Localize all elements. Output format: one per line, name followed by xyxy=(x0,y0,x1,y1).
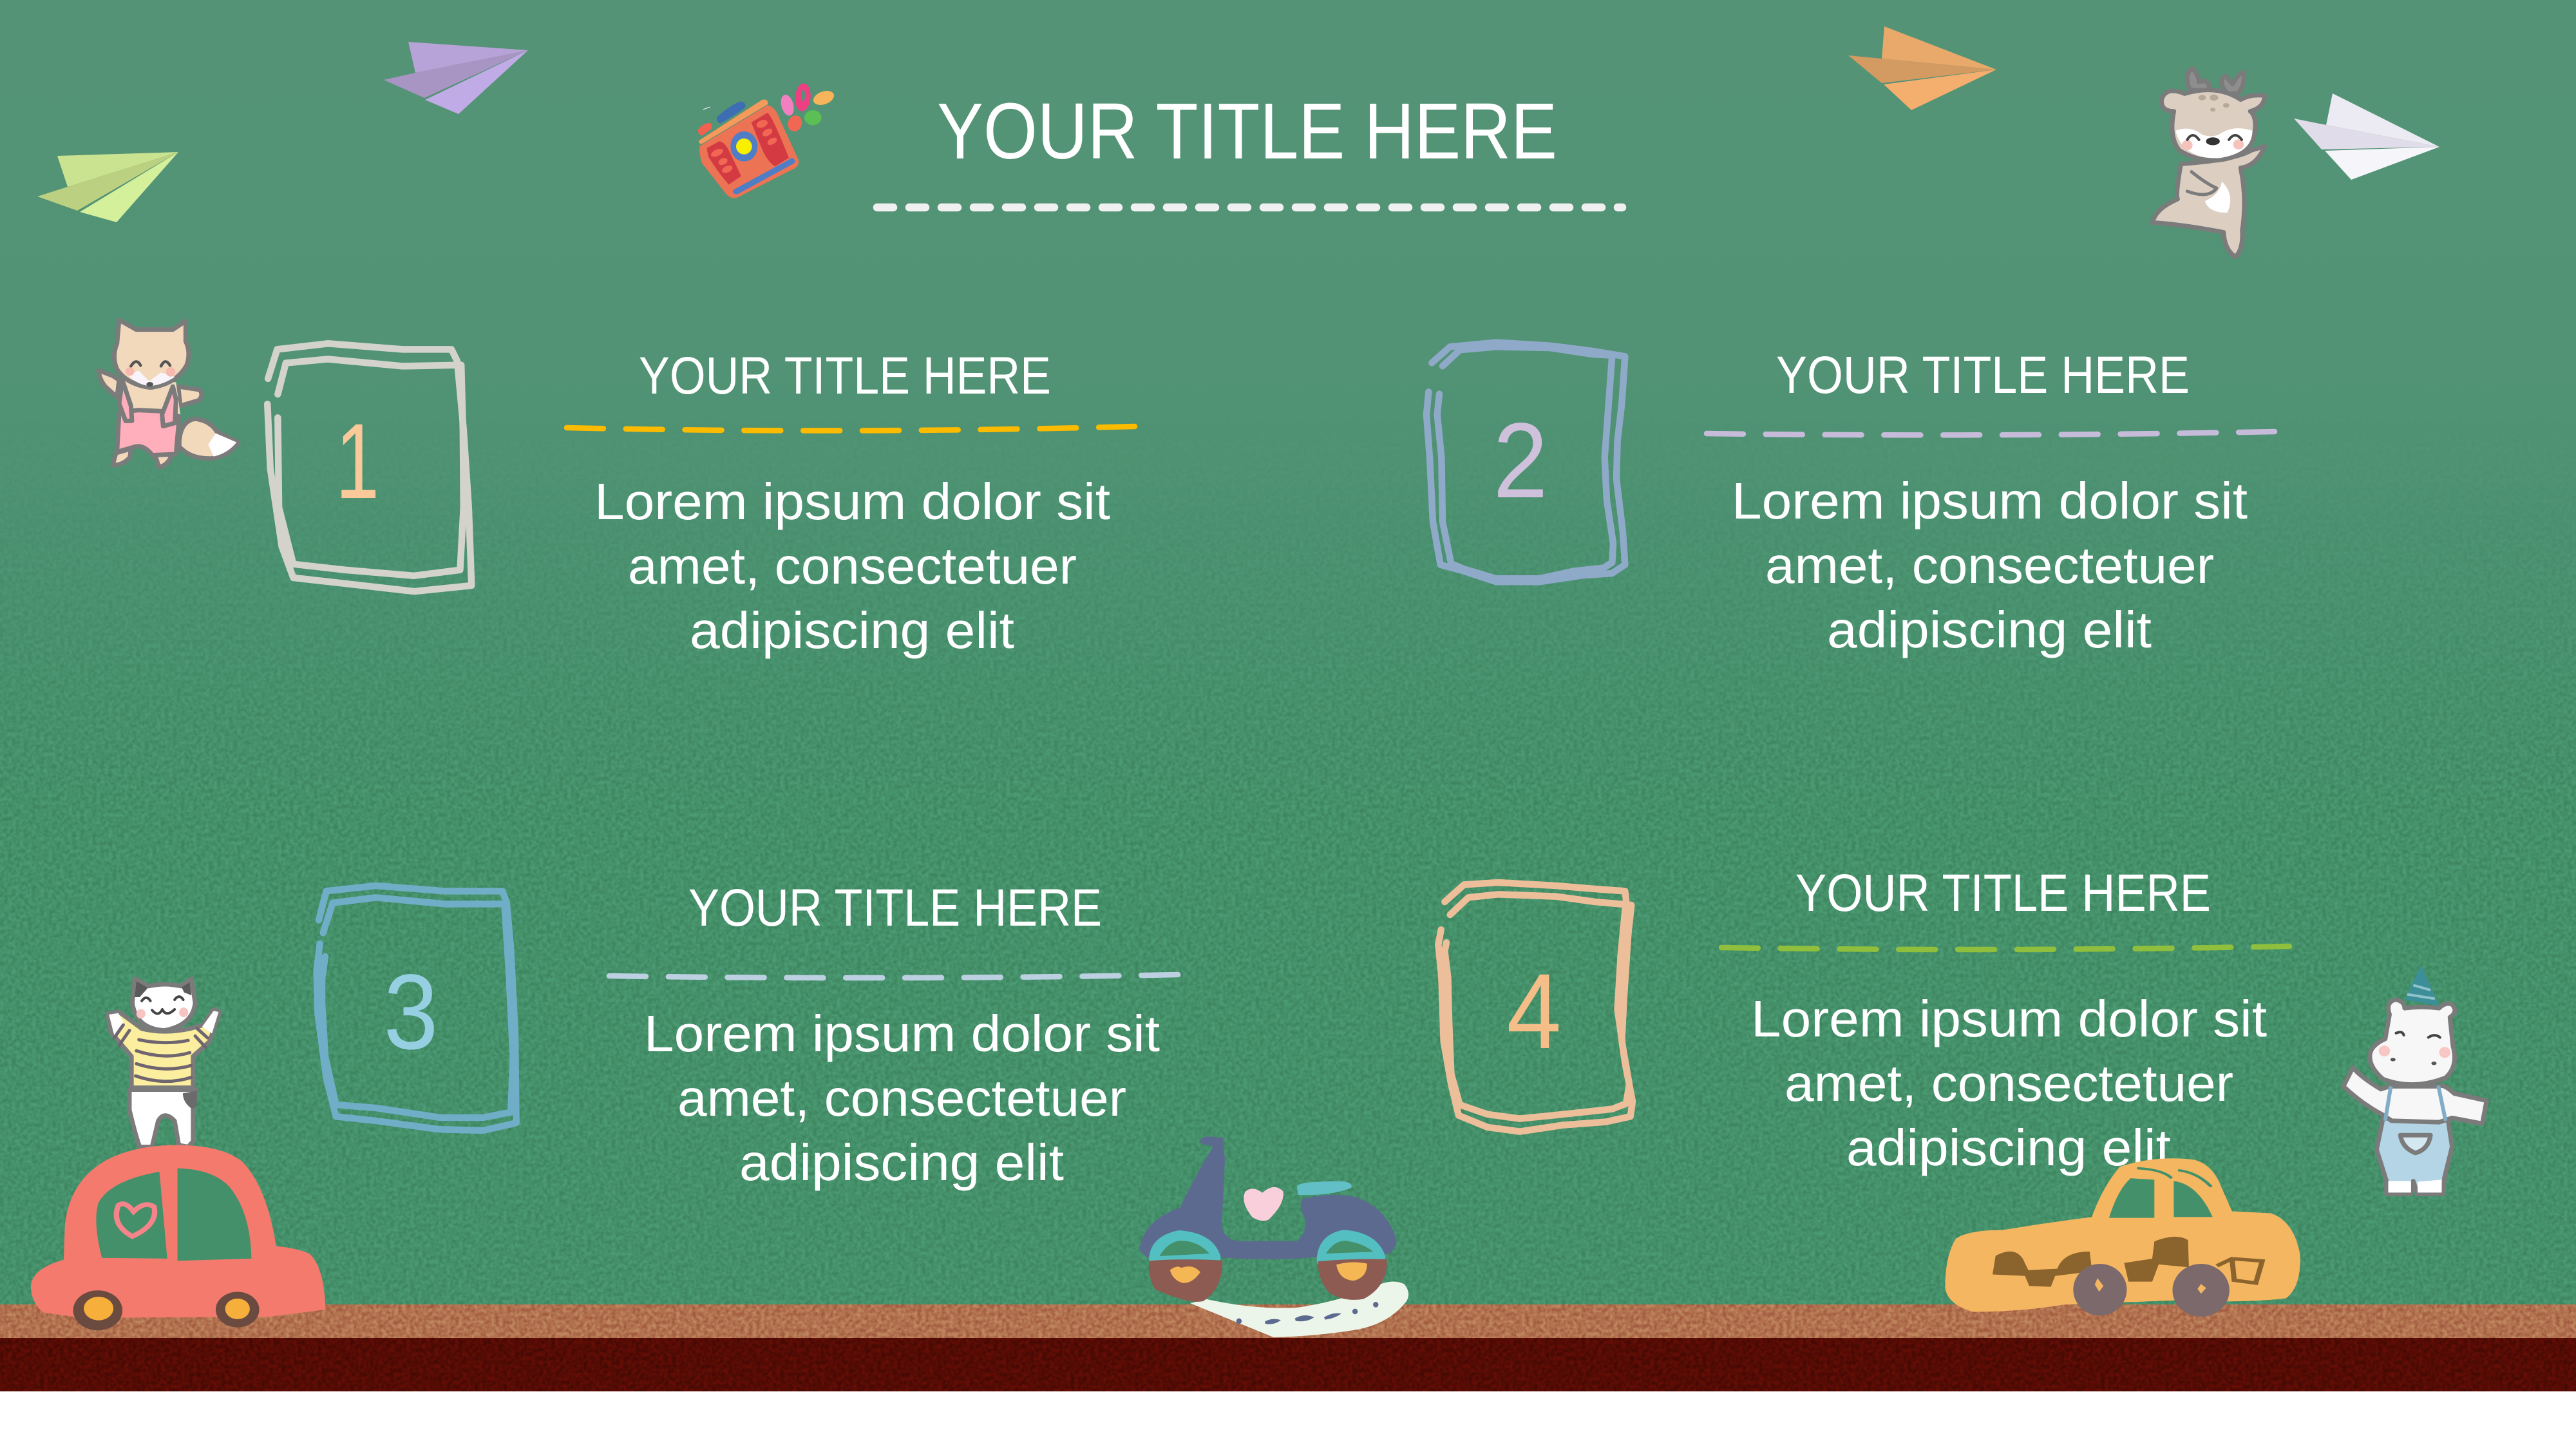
body text 3: amet, consectetuer xyxy=(677,1069,1126,1127)
number 2: 2 xyxy=(1493,401,1548,520)
character: fox in pink overalls xyxy=(99,320,238,467)
body text 3: Lorem ipsum dolor sit xyxy=(644,1005,1160,1062)
body text 3: adipiscing elit xyxy=(739,1134,1064,1191)
dashed divider 2 xyxy=(1707,432,2275,435)
body text 4 xyxy=(1751,990,2267,1176)
title dashed divider xyxy=(877,204,1622,211)
heading 1: YOUR TITLE HERE xyxy=(639,347,1051,405)
body text 4: amet, consectetuer xyxy=(1785,1054,2233,1112)
body text 1: adipiscing elit xyxy=(690,602,1014,659)
heading 3: YOUR TITLE HERE xyxy=(688,879,1102,937)
icon: yellow taxi xyxy=(1945,1158,2300,1317)
heading 2: YOUR TITLE HERE xyxy=(1776,346,2190,405)
paper plane: white xyxy=(2294,93,2439,180)
panel: block 4 xyxy=(1438,864,2289,1176)
number 4: 4 xyxy=(1507,952,1561,1071)
body text 2: adipiscing elit xyxy=(1827,601,2152,658)
panel: block 3 xyxy=(317,879,1179,1191)
number frame 1 xyxy=(267,343,471,591)
character: cat in striped sweater xyxy=(108,978,220,1147)
body text 2 xyxy=(1732,472,2248,658)
body text 1 xyxy=(594,473,1110,659)
icon: toy camera xyxy=(698,82,836,198)
body text 2: Lorem ipsum dolor sit xyxy=(1732,472,2248,529)
character: hippo in blue overalls xyxy=(2344,965,2486,1194)
title: YOUR TITLE HERE xyxy=(937,88,1557,176)
dashed divider 1 xyxy=(567,426,1135,431)
body text 1: amet, consectetuer xyxy=(628,537,1077,595)
number frame 2 xyxy=(1426,343,1625,582)
panel: block 1 xyxy=(267,343,1135,659)
dashed divider 4 xyxy=(1721,946,2289,949)
body text 1: Lorem ipsum dolor sit xyxy=(594,473,1110,530)
number 3: 3 xyxy=(384,953,438,1072)
paper plane: purple xyxy=(384,42,528,114)
paper plane: orange xyxy=(1848,26,1996,110)
heading 4: YOUR TITLE HERE xyxy=(1795,864,2211,922)
number frame 4 xyxy=(1438,882,1633,1132)
dashed divider 3 xyxy=(609,975,1179,978)
number 1: 1 xyxy=(336,402,379,521)
chalk ledge xyxy=(0,1304,2576,1391)
panel: block 2 xyxy=(1426,343,2275,658)
paper plane: green xyxy=(37,152,178,222)
body text 2: amet, consectetuer xyxy=(1765,537,2214,594)
icon: red car xyxy=(31,1145,325,1330)
body text 3 xyxy=(644,1005,1160,1191)
character: deer xyxy=(2152,68,2265,257)
body text 4: adipiscing elit xyxy=(1846,1119,2171,1176)
body text 4: Lorem ipsum dolor sit xyxy=(1751,990,2267,1047)
number frame 3 xyxy=(317,886,516,1130)
icon: scooter on road xyxy=(1139,1136,1408,1337)
